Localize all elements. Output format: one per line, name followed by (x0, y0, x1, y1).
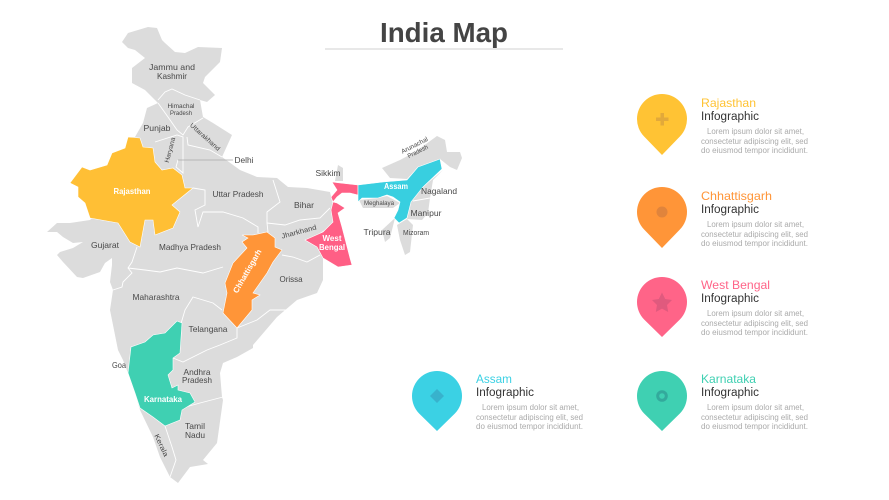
state labels: Gujarat (91, 240, 120, 250)
icon: dot (656, 206, 668, 218)
state labels: Goa (112, 360, 126, 370)
state labels: Bengal (319, 243, 345, 252)
state labels: Pradesh (407, 144, 430, 160)
body text: consectetur adipiscing elit, sed (701, 230, 808, 239)
title: India Map (380, 17, 508, 48)
state labels: Kashmir (157, 71, 187, 81)
title underline (325, 48, 563, 50)
state labels: Pradesh (170, 110, 192, 117)
state labels (91, 62, 457, 458)
state labels: Arunachal (400, 136, 430, 155)
state labels: Orissa (280, 274, 303, 284)
subheading: Infographic (476, 387, 534, 399)
body text: do eiusmod tempor incididunt. (476, 422, 583, 431)
icon: West Bengal pin (637, 277, 687, 337)
state labels: Assam (384, 182, 408, 191)
state labels: Nadu (185, 430, 205, 440)
state labels: Telangana (188, 324, 228, 334)
state labels: Manipur (410, 208, 442, 218)
Meghalaya (359, 196, 400, 208)
state labels: West (322, 234, 342, 243)
mainland (47, 27, 337, 483)
subheading: Infographic (701, 204, 759, 216)
panel: West Bengal (637, 277, 808, 337)
state labels: Delhi (234, 155, 254, 165)
heading: Chhattisgarh (701, 189, 772, 203)
state labels: Jammu and (149, 62, 195, 72)
panel: Rajasthan (637, 94, 808, 155)
body text (476, 403, 583, 431)
panel: Karnataka (637, 371, 808, 431)
Arunachal Pradesh (382, 136, 462, 179)
state labels: Uttar Pradesh (212, 189, 264, 199)
body text (701, 403, 808, 431)
body text: Lorem ipsum dolor sit amet, (482, 403, 579, 412)
state labels: Maharashtra (132, 292, 180, 302)
icon: diamond (430, 389, 444, 403)
panel: Assam (412, 371, 583, 431)
state labels: Andhra (184, 367, 211, 377)
heading: Rajasthan (701, 96, 756, 110)
heading: Karnataka (701, 372, 756, 386)
body text: Lorem ipsum dolor sit amet, (707, 403, 804, 412)
state labels: Uttarakhand (188, 122, 221, 153)
Delhi leader line (178, 159, 233, 161)
body text (701, 309, 808, 337)
icon: Rajasthan pin (637, 94, 687, 155)
state labels: Tripura (364, 227, 391, 237)
Tripura (382, 218, 395, 242)
panel: Chhattisgarh (637, 187, 808, 248)
Karnataka (128, 321, 195, 426)
state labels: Mizoram (403, 230, 429, 237)
Nagaland and Manipur (407, 170, 443, 220)
Sikkim (335, 165, 343, 181)
body text: Lorem ipsum dolor sit amet, (707, 220, 804, 229)
body text: consectetur adipiscing elit, sed (701, 413, 808, 422)
subheading: Infographic (701, 387, 759, 399)
Assam (358, 159, 442, 223)
icon: Chhattisgarh pin (637, 187, 687, 248)
Rajasthan (70, 137, 193, 247)
Chhattisgarh (223, 232, 282, 328)
state labels: Haryana (164, 136, 177, 164)
body text: do eiusmod tempor incididunt. (701, 422, 808, 431)
subheading: Infographic (701, 293, 759, 305)
body text: Lorem ipsum dolor sit amet, (707, 309, 804, 318)
body text: consectetur adipiscing elit, sed (701, 319, 808, 328)
icon: ring (658, 392, 666, 400)
icon: Assam pin (412, 371, 462, 431)
state labels: Bihar (294, 200, 314, 210)
heading: Assam (476, 372, 512, 386)
state labels: Karnataka (144, 395, 183, 404)
state labels: Tamil (185, 421, 205, 431)
body text: consectetur adipiscing elit, sed (701, 137, 808, 146)
body text: Lorem ipsum dolor sit amet, (707, 127, 804, 136)
state labels: Madhya Pradesh (159, 242, 221, 252)
body text (701, 127, 808, 155)
icon: star (652, 292, 672, 312)
state labels: Chhattisgarh (231, 248, 264, 295)
West Bengal (305, 182, 358, 267)
state labels: Sikkim (316, 168, 340, 178)
state labels: Nagaland (421, 186, 457, 196)
map: India (47, 27, 462, 483)
subheading: Infographic (701, 111, 759, 123)
state labels: Jharkhand (281, 224, 318, 241)
state labels: Meghalaya (364, 200, 394, 207)
state borders (113, 89, 430, 477)
state labels: Rajasthan (114, 187, 151, 196)
icon: Karnataka pin (637, 371, 687, 431)
Mizoram (397, 219, 413, 255)
body text: consectetur adipiscing elit, sed (476, 413, 583, 422)
body text: do eiusmod tempor incididunt. (701, 328, 808, 337)
heading: West Bengal (701, 278, 770, 292)
icon: plus (656, 113, 668, 126)
body text (701, 220, 808, 248)
state labels: Punjab (144, 123, 171, 133)
state labels: Pradesh (182, 375, 212, 385)
body text: do eiusmod tempor incididunt. (701, 239, 808, 248)
body text: do eiusmod tempor incididunt. (701, 146, 808, 155)
state labels: Kerala (152, 433, 169, 458)
state labels: Himachal (168, 103, 195, 110)
